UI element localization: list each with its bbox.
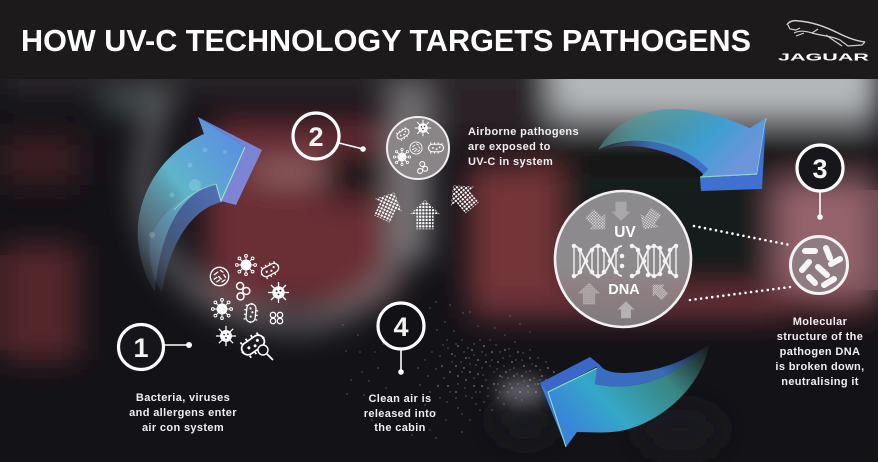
step 3 text: is broken down, [775, 361, 865, 373]
step 4 text: released into [364, 408, 436, 420]
pathogen breakdown circle [790, 236, 848, 294]
step 1 text: air con system [142, 422, 224, 434]
clean air spray particles [343, 302, 558, 438]
DNA label: DNA [608, 282, 640, 298]
step 2 text: Airborne pathogens [468, 126, 579, 138]
step 3 text: Molecular [793, 316, 848, 328]
UV label: UV [614, 224, 636, 241]
step 3 badge: 3 [812, 154, 828, 184]
step 1 badge [118, 324, 192, 370]
step 2 badge [293, 113, 366, 159]
title: HOW UV-C TECHNOLOGY TARGETS PATHOGENS [21, 24, 751, 58]
arrow 2: down to step 3 [598, 109, 766, 191]
step 3 badge [797, 145, 843, 220]
DNA double helix [574, 246, 676, 276]
step 4 badge [378, 303, 424, 375]
step 1 badge: 1 [133, 333, 149, 363]
icon: leaping jaguar [787, 21, 865, 46]
step 1 text: Bacteria, viruses [136, 392, 230, 404]
pathogen icons cluster [210, 254, 289, 361]
header bar [0, 0, 878, 79]
step 3 text: structure of the [777, 331, 863, 343]
bokeh highlights on arrow [149, 148, 227, 238]
logo wordmark: JAGUAR [778, 52, 871, 64]
arrow 1: up to step 2 [138, 117, 262, 292]
dotted connector lines [690, 226, 790, 300]
UV arrows around DNA [578, 202, 671, 318]
step 2 text: UV-C in system [468, 156, 553, 168]
step 2 badge: 2 [308, 122, 324, 152]
DNA lens circle [555, 191, 691, 327]
step 3 text: pathogen DNA [780, 346, 860, 358]
step 4 text: Clean air is [368, 393, 432, 405]
icon: bacterium under magnifier [236, 329, 273, 361]
step 4 badge: 4 [393, 312, 409, 342]
step 3 text: neutralising it [781, 376, 859, 388]
step 4 text: the cabin [374, 422, 426, 434]
step 2 text: are exposed to [468, 141, 551, 153]
dotted UV arrows up to lens [369, 176, 483, 229]
arrow 3: out to cabin [540, 343, 710, 447]
jaguar logo [778, 21, 871, 64]
pathogen lens circle [387, 117, 449, 179]
step 1 text: and allergens enter [129, 407, 237, 419]
